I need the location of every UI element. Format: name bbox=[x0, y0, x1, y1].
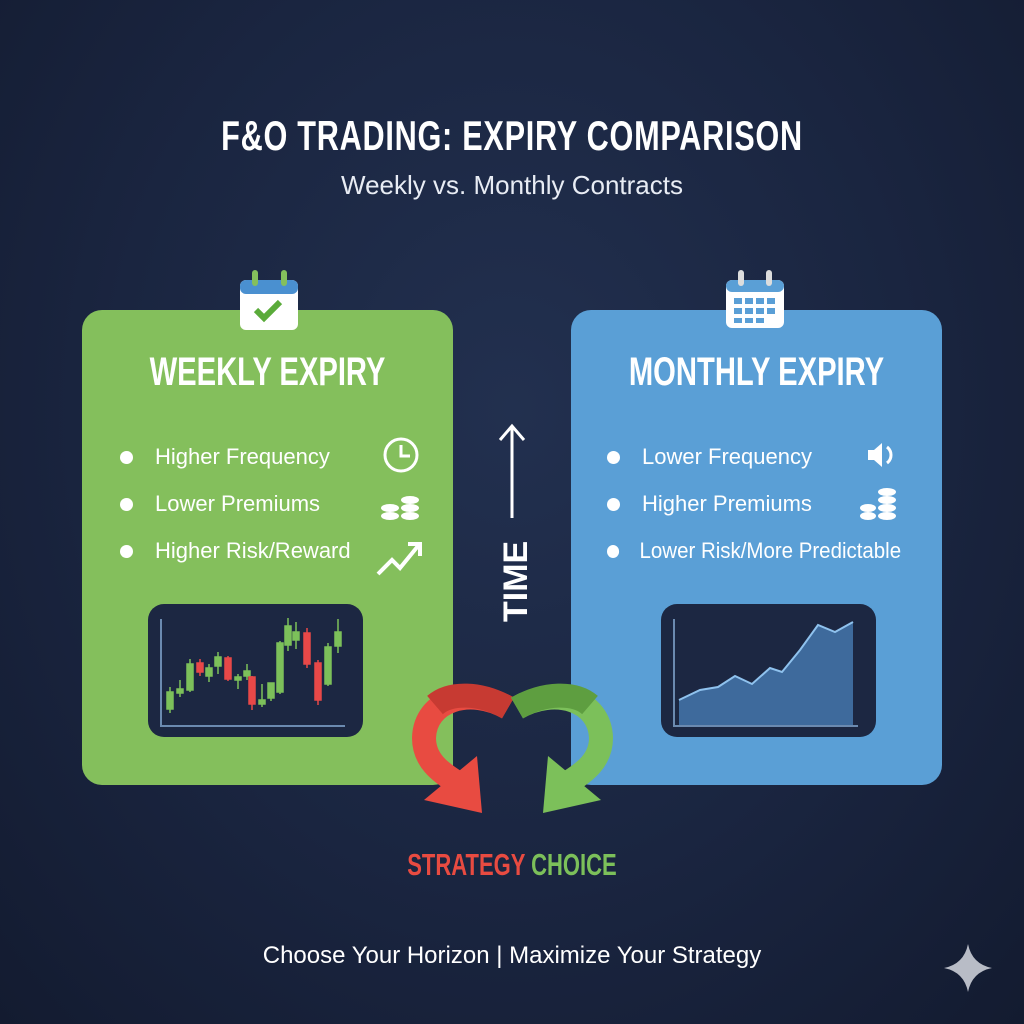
list: monthly features: Lower Risk/More Predictable bbox=[640, 538, 901, 563]
arrow: time bbox=[497, 426, 535, 622]
list: weekly features: Lower Premiums bbox=[155, 491, 320, 516]
icon: trend up bbox=[378, 544, 420, 574]
arrow: green curved bbox=[517, 696, 601, 813]
chart: candlestick bbox=[148, 604, 363, 737]
list: weekly features: Higher Risk/Reward bbox=[155, 538, 351, 563]
label: strategy choice: STRATEGY CHOICE bbox=[407, 847, 617, 882]
heading: weekly expiry: WEEKLY EXPIRY bbox=[150, 350, 385, 394]
title: F&O TRADING: EXPIRY COMPARISON bbox=[221, 112, 803, 159]
list: weekly features bbox=[120, 444, 351, 563]
arrow: red curved bbox=[424, 696, 508, 813]
icon: coins left bbox=[381, 496, 419, 520]
icon: calendar grid bbox=[726, 270, 784, 328]
chart: area bbox=[661, 604, 876, 737]
icon: speaker bbox=[868, 443, 891, 467]
panel: monthly bbox=[571, 310, 942, 785]
icon: calendar check bbox=[240, 270, 298, 330]
icon: coins right bbox=[860, 488, 896, 520]
heading: monthly expiry: MONTHLY EXPIRY bbox=[629, 350, 884, 394]
list: weekly features: Higher Frequency bbox=[155, 444, 330, 469]
list: monthly features: Higher Premiums bbox=[642, 491, 812, 516]
label: time: TIME bbox=[497, 541, 535, 622]
footer: Choose Your Horizon | Maximize Your Strategy bbox=[263, 942, 761, 969]
list: monthly features: Lower Frequency bbox=[642, 444, 812, 469]
icon: clock bbox=[385, 439, 417, 471]
panel: weekly bbox=[82, 310, 453, 785]
icon: sparkle bbox=[944, 944, 992, 992]
list: monthly features bbox=[607, 444, 901, 563]
subtitle: Weekly vs. Monthly Contracts bbox=[341, 170, 683, 200]
